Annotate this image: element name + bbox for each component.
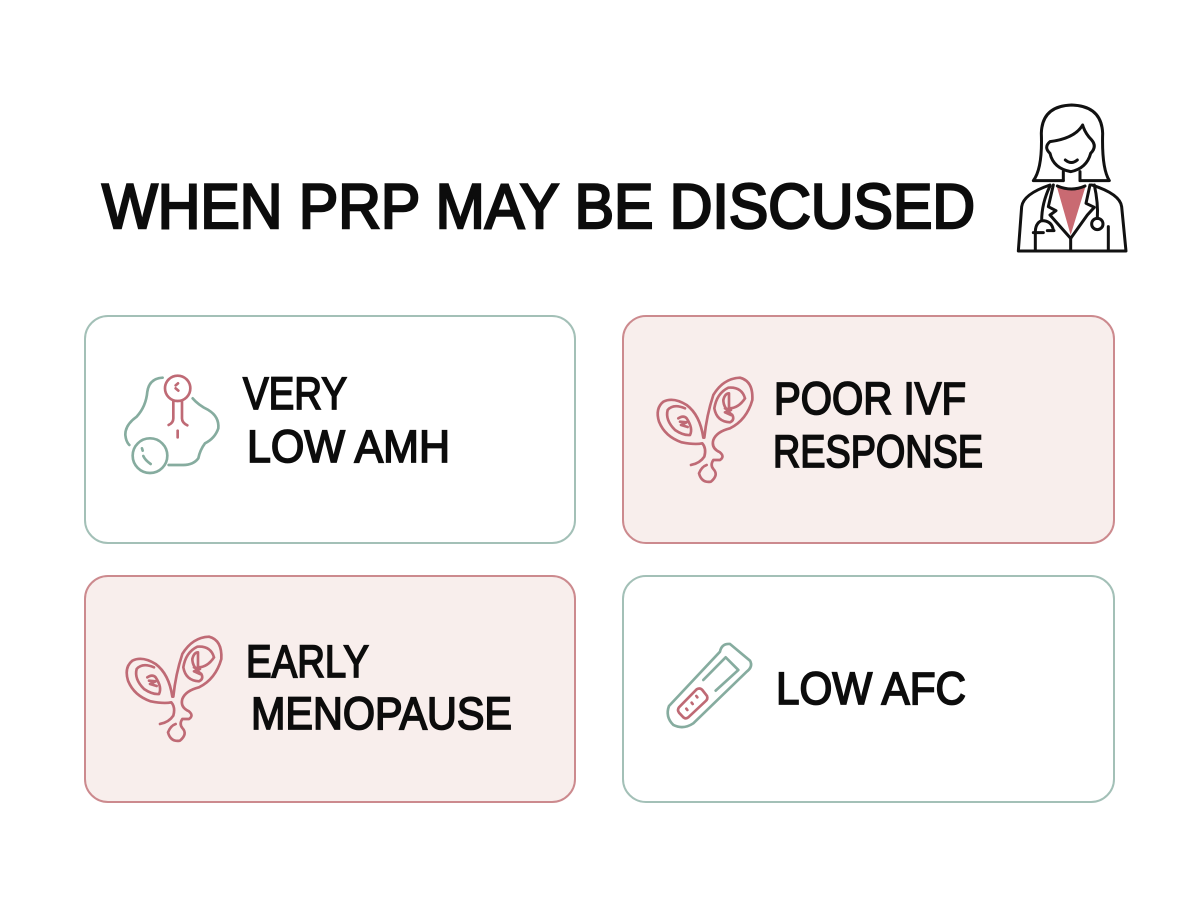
label: poor IVF response xyxy=(773,373,983,477)
label: early menopause xyxy=(246,636,512,739)
label: early menopause: EARLY xyxy=(246,636,369,687)
title: WHEN PRP MAY BE DISCUSED xyxy=(102,172,975,242)
label: very low AMH: VERY xyxy=(243,368,347,419)
label: very low AMH xyxy=(243,368,450,472)
icon: uterus and ovaries xyxy=(658,378,752,482)
panel: low AFC xyxy=(623,576,1114,802)
label: very low AMH: LOW AMH xyxy=(247,421,450,472)
panel: very low AMH xyxy=(85,316,575,543)
label: early menopause: MENOPAUSE xyxy=(251,688,512,739)
label: poor IVF response: RESPONSE xyxy=(773,426,983,477)
icon: female doctor xyxy=(1018,105,1126,251)
icon: uterus and ovaries xyxy=(127,637,221,741)
label: low AFC: LOW AFC xyxy=(776,663,966,714)
icon: follicle and cell xyxy=(125,376,218,473)
panel: poor IVF response xyxy=(623,316,1114,543)
label: poor IVF response: POOR IVF xyxy=(774,373,966,424)
icon: test tube xyxy=(668,644,751,727)
panel: early menopause xyxy=(85,576,575,802)
